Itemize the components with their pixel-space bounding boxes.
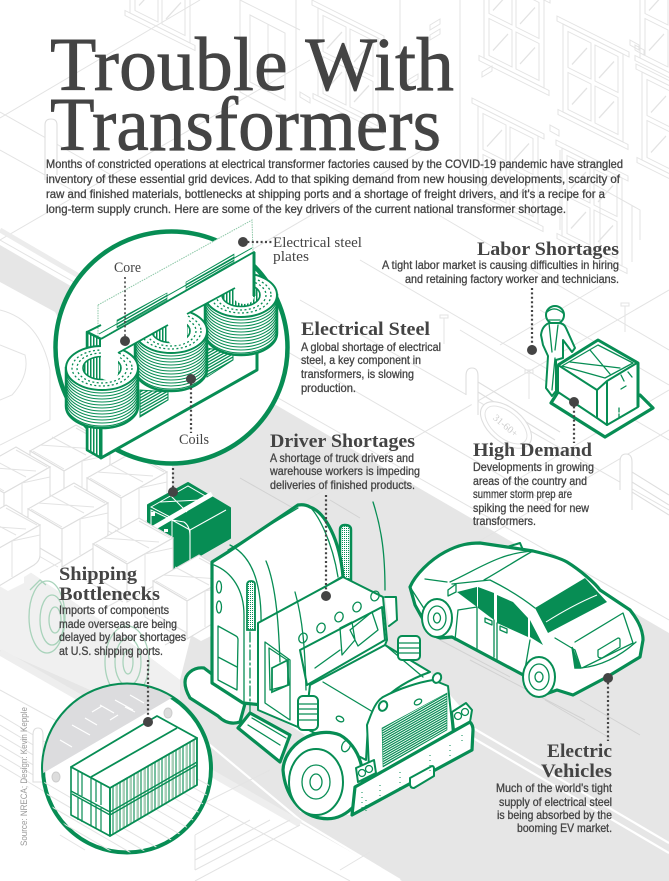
text: driver shortages: A shortage of truck drivers and <box>270 452 414 465</box>
air cleaner left <box>298 696 318 730</box>
leader: high demand <box>569 397 579 443</box>
title <box>50 23 454 167</box>
dock rails and bollards <box>0 715 300 881</box>
box <box>558 340 638 425</box>
text: electric vehicles <box>496 741 613 835</box>
road surface <box>0 245 669 881</box>
leader: green crate <box>168 468 178 497</box>
sleeper cab <box>212 505 343 705</box>
white loading yard <box>0 282 205 680</box>
leader: worker <box>527 288 537 355</box>
stacked containers <box>71 716 197 836</box>
source credit: Source: NRECA; Design: Kevin Kepple <box>19 707 30 846</box>
text: shipping bottlenecks: at U.S. shipping ports. <box>59 645 163 658</box>
text: high demand: transformers. <box>473 515 536 528</box>
intro paragraph: long-term supply crunch. Here are some of the key drivers of the current national transformer shortage. <box>46 203 566 216</box>
text: driver shortages <box>269 431 420 492</box>
label: core: Core <box>114 260 141 276</box>
pallet <box>551 392 653 437</box>
car roof lines <box>410 551 535 610</box>
text: driver shortages: deliveries of finished products. <box>270 479 415 492</box>
text: electric vehicles: Electric <box>547 741 612 762</box>
leader: shipping containers <box>143 660 153 727</box>
antennas <box>266 561 306 690</box>
exhaust stack right <box>340 525 351 580</box>
text: electric vehicles: booming EV market. <box>517 822 612 835</box>
doors and trim <box>455 607 636 675</box>
antenna right <box>373 502 385 590</box>
front wheel and fender <box>283 732 363 819</box>
text: shipping bottlenecks: Imports of components <box>59 604 169 617</box>
address sign <box>472 393 540 457</box>
dock strip <box>0 553 180 730</box>
text: electric vehicles: Much of the world's tight <box>496 782 613 795</box>
lower yoke <box>87 300 257 458</box>
translucent steel plate <box>98 220 253 340</box>
label: electrical steel plates <box>273 235 362 265</box>
panel: shipping containers circle <box>40 680 212 868</box>
leader: core <box>120 277 130 346</box>
text: electric vehicles: supply of electrical steel <box>499 796 612 809</box>
text: electrical steel: steel, a key component in <box>301 354 421 367</box>
text: labor shortages <box>382 239 619 286</box>
circle frame <box>56 232 288 464</box>
text: high demand: areas of the country and <box>473 475 587 488</box>
bumper <box>352 722 473 815</box>
coils <box>66 273 277 428</box>
rear wheel <box>523 657 555 697</box>
text: shipping bottlenecks: Shipping <box>59 564 138 585</box>
port dock <box>43 684 210 852</box>
leader: driver shortages <box>321 495 331 601</box>
parked vehicle outline <box>0 310 50 445</box>
fence posts <box>45 119 669 515</box>
label: electrical steel plates: Electrical steel <box>273 235 362 251</box>
exhaust stack left <box>247 581 255 630</box>
intro paragraph: raw and finished materials, bottlenecks at shipping ports and a shortage of freight drivers, and it's a recipe for a <box>46 188 606 201</box>
headlights <box>356 703 472 782</box>
text: labor shortages: A tight labor market is causing difficulties in hiring <box>382 259 619 272</box>
license plate <box>598 638 620 658</box>
text: electric vehicles: Vehicles <box>541 761 612 782</box>
intro paragraph: Months of constricted operations at electrical transformer factories caused by the COVID-19 pandemic have strangled <box>46 158 623 171</box>
text: labor shortages: and retaining factory worker and technicians. <box>405 273 619 286</box>
text: electric vehicles: is being absorbed by the <box>497 809 612 822</box>
text: labor shortages: Labor Shortages <box>477 239 619 260</box>
text: shipping bottlenecks: delayed by labor shortages <box>59 631 186 644</box>
ghost truck wheels <box>29 580 149 698</box>
text: driver shortages: Driver Shortages <box>270 431 415 452</box>
road markings <box>0 478 669 881</box>
illustration: electric car <box>410 543 643 697</box>
text: driver shortages: warehouse workers is impeding <box>269 465 420 478</box>
text: electrical steel <box>301 319 441 395</box>
hood <box>305 645 430 760</box>
illustration: semi truck <box>185 502 473 819</box>
worker <box>541 306 575 396</box>
text: high demand: summer storm prep are <box>473 488 572 501</box>
title: Trouble With <box>50 23 454 107</box>
car body <box>410 543 643 695</box>
mirror <box>385 597 397 626</box>
text: electrical steel: Electrical Steel <box>301 319 430 340</box>
title: Transformers <box>50 83 441 167</box>
circle frame <box>43 684 211 852</box>
parked transformer crates <box>0 425 167 595</box>
text: shipping bottlenecks: made overseas are being <box>59 618 177 631</box>
text: high demand <box>473 440 594 528</box>
laminated core yoke <box>99 248 254 380</box>
icon: green transformer crate <box>148 483 230 575</box>
parking meters <box>440 303 629 399</box>
sidewalk and curb lines <box>0 0 669 620</box>
fuel tank <box>185 668 246 723</box>
text: shipping bottlenecks <box>59 564 186 658</box>
text: high demand: spiking the need for new <box>473 502 590 515</box>
rear window <box>535 578 607 633</box>
cab <box>258 577 387 730</box>
air cleaner right <box>398 636 420 660</box>
text: electrical steel: production. <box>301 382 356 395</box>
label: coils: Coils <box>179 432 209 448</box>
leader: electrical steel plates <box>238 237 272 247</box>
label: electrical steel plates: plates <box>273 249 309 265</box>
intro paragraph: inventory of these essential grid devices. Add to that spiking demand from new housing developments, scarcity of <box>46 173 621 186</box>
crates in front of green crate <box>85 518 233 645</box>
leader: electric car <box>603 673 613 741</box>
panel: electrical steel transformer circle <box>56 220 288 464</box>
truck silhouette <box>258 645 472 815</box>
step <box>238 713 290 762</box>
text: shipping bottlenecks: Bottlenecks <box>59 584 160 605</box>
text: high demand: High Demand <box>473 440 592 461</box>
grille <box>367 672 454 790</box>
side windows <box>457 587 543 645</box>
building windows <box>124 0 669 274</box>
address sign: 31-60+ <box>490 413 520 440</box>
front wheel <box>422 599 452 637</box>
text: high demand: Developments in growing <box>473 461 594 474</box>
leader: coils <box>186 374 196 433</box>
text: electrical steel: A global shortage of electrical <box>301 341 441 354</box>
text: electrical steel: transformers, is slowing <box>301 368 414 381</box>
tail light <box>572 647 580 668</box>
illustration: factory worker with transformer on pallet <box>541 306 653 437</box>
intro paragraph <box>46 158 623 216</box>
